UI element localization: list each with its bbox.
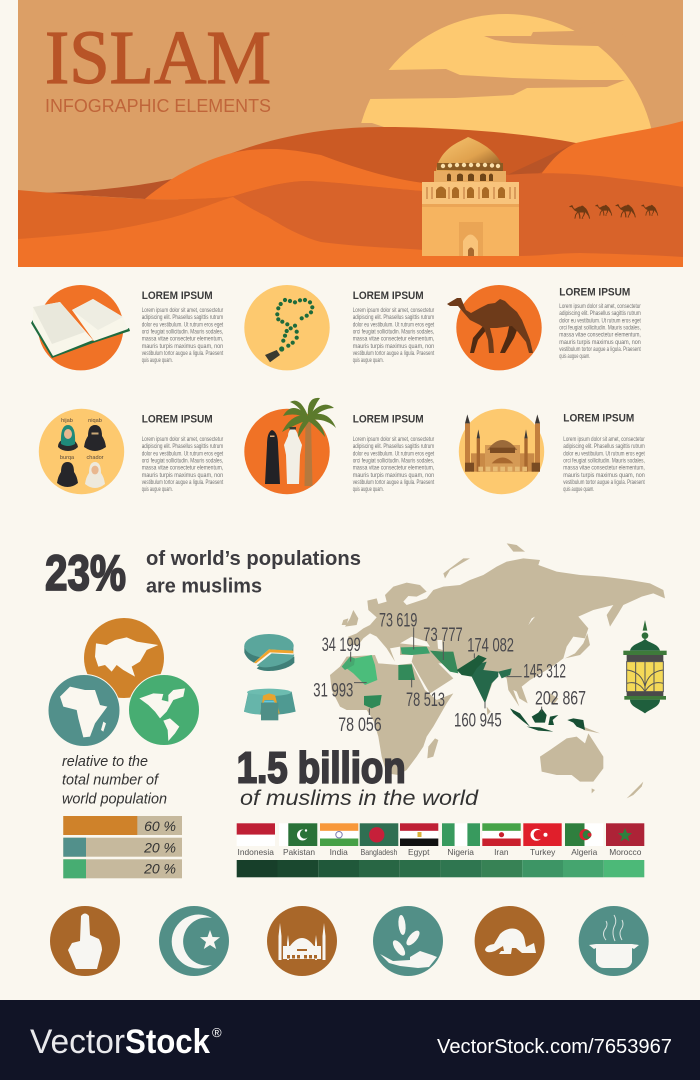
text block: lorem ipsum 6: dolor eu vestibulum. Ut rutrum eros eget (563, 450, 645, 457)
gradient scale (237, 860, 644, 877)
icon: veils (39, 409, 124, 494)
panel: desert hero (18, 0, 683, 267)
text block: lorem ipsum 5 (353, 414, 435, 493)
text block: lorem ipsum 3: dolor eu vestibulum. Ut rutrum eros eget (559, 317, 641, 324)
text block: lorem ipsum 3: orci feugiat sollicitudin. Mauris sodales, (559, 324, 641, 332)
text block: lorem ipsum 5: LOREM IPSUM (353, 414, 424, 426)
text block: lorem ipsum 3: quis augue quam. (559, 353, 590, 360)
camel caravan (569, 204, 658, 219)
caption: relative to total: total number of (62, 772, 160, 788)
flag: Morocco (606, 823, 644, 857)
text block: lorem ipsum 6: Lorem ipsum dolor sit amet, consectetur (563, 436, 645, 443)
icon: lantern (623, 620, 667, 713)
bar chart: 20 % (143, 839, 176, 855)
flag: India (320, 823, 358, 857)
flag: Nigeria: Nigeria (447, 847, 474, 857)
text block: lorem ipsum 2: adipiscing elit. Phasellus sagittis rutrum (353, 314, 434, 321)
text block: lorem ipsum 4: mauris turpis maximus quam, non (142, 472, 224, 479)
text block: lorem ipsum 5: quis augue quam. (353, 486, 384, 493)
map value labels: 31 993 (313, 680, 353, 702)
text block: lorem ipsum 5: Lorem ipsum dolor sit amet, consectetur (353, 436, 435, 443)
text block: lorem ipsum 3: massa vitae consectetur elementum, (559, 332, 641, 339)
stat: 23 percent: 23% (45, 545, 126, 601)
icon: open book (31, 285, 130, 370)
map value labels: 160 945 (454, 710, 502, 732)
watermark band: VectorStock.com/7653967 (437, 1036, 672, 1058)
text block: lorem ipsum 1: mauris turpis maximus quam, non (142, 343, 224, 350)
text block: lorem ipsum 2: dolor eu vestibulum. Ut rutrum eros eget (353, 321, 434, 328)
inland seas (400, 617, 535, 650)
text block: lorem ipsum 5: mauris turpis maximus quam, non (353, 472, 435, 479)
caption: relative to total (62, 754, 167, 807)
text block: lorem ipsum 1: adipiscing elit. Phasellus sagittis rutrum (142, 314, 223, 321)
text block: lorem ipsum 1: LOREM IPSUM (142, 290, 213, 302)
icon: prayer beads (244, 285, 330, 370)
flag: Iran (482, 823, 521, 857)
text block: lorem ipsum 2: orci feugiat sollicitudin. Mauris sodales, (353, 328, 434, 336)
text block: lorem ipsum 5: dolor eu vestibulum. Ut rutrum eros eget (353, 450, 434, 457)
stat: 23 percent: are muslims (146, 576, 262, 598)
stat: 23 percent (45, 545, 361, 601)
icon: pie slice (244, 634, 294, 671)
icon: pointing hand (50, 906, 120, 976)
flag: Morocco: Morocco (609, 847, 642, 857)
text block: lorem ipsum 1: vestibulum tortor augue a ligula. Praesent (142, 350, 223, 357)
text block: lorem ipsum 3: adipiscing elit. Phasellus sagittis rutrum (559, 310, 641, 317)
text block: lorem ipsum 2: mauris turpis maximus quam, non (353, 343, 435, 350)
dunes (18, 121, 683, 267)
map value labels: 78 513 (406, 689, 445, 711)
text block: lorem ipsum 6: LOREM IPSUM (563, 413, 634, 425)
sun (361, 14, 651, 143)
continent circles (48, 618, 200, 746)
text block: lorem ipsum 3: LOREM IPSUM (559, 287, 630, 299)
caption: relative to total: relative to the (62, 754, 148, 770)
watermark band: Vector (30, 1023, 125, 1061)
map value labels: 73 777 (423, 624, 463, 646)
icon: crescent and star (159, 906, 229, 976)
flag: Nigeria (442, 823, 480, 857)
text block: lorem ipsum 3 (559, 287, 641, 360)
text block: lorem ipsum 5: adipiscing elit. Phasellus sagittis rutrum (353, 443, 434, 450)
text block: lorem ipsum 6: massa vitae consectetur elementum, (563, 465, 645, 472)
text block: lorem ipsum 1 (142, 290, 224, 364)
leader lines (351, 627, 542, 715)
flag: Algeria: Algeria (571, 847, 598, 857)
text block: lorem ipsum 3: Lorem ipsum dolor sit amet, consectetur (559, 303, 641, 310)
icon: veils: hijab (61, 418, 73, 424)
flag: Egypt: Egypt (408, 847, 430, 857)
bar chart: 60 % (144, 818, 176, 834)
icon: cap (244, 689, 296, 720)
text block: lorem ipsum 4: LOREM IPSUM (142, 414, 213, 426)
bar chart: 20 % (143, 860, 176, 876)
text block: lorem ipsum 6: vestibulum tortor augue a ligula. Praesent (563, 479, 645, 486)
subtitle: INFOGRAPHIC ELEMENTS (45, 95, 271, 116)
highlighted countries (342, 647, 585, 732)
map value labels: 73 619 (379, 610, 417, 632)
icon: veils: niqab (88, 418, 102, 424)
flag: Indonesia (237, 823, 275, 857)
text block: lorem ipsum 3: vestibulum tortor augue a ligula. Praesent (559, 346, 641, 353)
watermark band: Stock (125, 1023, 210, 1061)
map value labels: 174 082 (467, 635, 514, 657)
map value labels: 78 056 (338, 714, 382, 736)
stat: 23 percent: of world’s populations (146, 548, 361, 570)
text block: lorem ipsum 1: Lorem ipsum dolor sit amet, consectetur (142, 307, 224, 314)
text block: lorem ipsum 4: orci feugiat sollicitudin. Mauris sodales, (142, 458, 223, 464)
text block: lorem ipsum 2: LOREM IPSUM (353, 290, 424, 302)
flag: Pakistan: Pakistan (283, 847, 315, 857)
text block: lorem ipsum 6: orci feugiat sollicitudin. Mauris sodales, (563, 458, 645, 464)
icon: cooking pot (579, 906, 649, 976)
map value labels: 145 312 (523, 661, 566, 683)
text block: lorem ipsum 4: massa vitae consectetur elementum, (142, 465, 223, 472)
text block: lorem ipsum 1: dolor eu vestibulum. Ut rutrum eros eget (142, 321, 223, 328)
text block: lorem ipsum 2: quis augue quam. (353, 357, 384, 364)
text block: lorem ipsum 4: dolor eu vestibulum. Ut rutrum eros eget (142, 450, 223, 457)
map value labels: 202 867 (535, 687, 586, 709)
flag: Bangladesh: Bangladesh (361, 847, 398, 857)
icon: praying figure (475, 906, 545, 976)
map value labels (313, 610, 586, 736)
text block: lorem ipsum 2: massa vitae consectetur elementum, (353, 336, 434, 343)
text block: lorem ipsum 5: vestibulum tortor augue a ligula. Praesent (353, 479, 434, 486)
flag: Turkey (523, 823, 562, 857)
text block: lorem ipsum 6: mauris turpis maximus quam, non (563, 472, 645, 479)
world map (330, 543, 665, 798)
text block: lorem ipsum 6: quis augue quam. (563, 486, 594, 493)
text block: lorem ipsum 5: orci feugiat sollicitudin. Mauris sodales, (353, 458, 434, 464)
icon: veils: chador (86, 455, 104, 461)
bar chart (63, 816, 182, 878)
text block: lorem ipsum 6: adipiscing elit. Phasellus sagittis rutrum (563, 443, 645, 450)
flag: Egypt (400, 823, 438, 857)
flag: Algeria (565, 823, 603, 857)
icon: couple and palm (244, 398, 336, 494)
flag: Turkey: Turkey (530, 847, 556, 857)
text block: lorem ipsum 4: Lorem ipsum dolor sit amet, consectetur (142, 436, 224, 443)
text block: lorem ipsum 5: massa vitae consectetur elementum, (353, 465, 434, 472)
watermark band (0, 1000, 700, 1080)
watermark band: ® (212, 1025, 222, 1040)
flag: Bangladesh (360, 823, 398, 857)
text block: lorem ipsum 1: quis augue quam. (142, 357, 173, 364)
text block: lorem ipsum 1: orci feugiat sollicitudin. Mauris sodales, (142, 328, 223, 336)
flag: India: India (330, 847, 348, 857)
icon: hand with coins (373, 906, 443, 976)
stat: 1.5 billion (237, 744, 479, 810)
text block: lorem ipsum 2: vestibulum tortor augue a ligula. Praesent (353, 350, 434, 357)
flag: Iran: Iran (494, 847, 509, 857)
text block: lorem ipsum 4 (142, 414, 224, 493)
icon: camel (447, 285, 542, 370)
flag: Indonesia: Indonesia (238, 847, 274, 857)
map value labels: 34 199 (322, 634, 361, 656)
icon: veils: burqa (60, 455, 75, 461)
text block: lorem ipsum 4: vestibulum tortor augue a ligula. Praesent (142, 479, 223, 486)
icon: mosque (459, 409, 544, 494)
text block: lorem ipsum 2: Lorem ipsum dolor sit amet, consectetur (353, 307, 435, 314)
flags row (237, 823, 644, 857)
text block: lorem ipsum 3: mauris turpis maximus quam, non (559, 339, 641, 346)
stat: 1.5 billion: of muslims in the world (240, 787, 479, 810)
text block: lorem ipsum 2 (353, 290, 435, 364)
mausoleum (422, 137, 519, 256)
text block: lorem ipsum 6 (563, 413, 645, 493)
text block: lorem ipsum 4: quis augue quam. (142, 486, 173, 493)
clouds (360, 31, 624, 128)
title: ISLAM (45, 16, 271, 100)
flag: Pakistan (279, 823, 317, 857)
icon: mosque silhouette (267, 906, 337, 976)
stat: 1.5 billion: 1.5 billion (237, 744, 406, 793)
text block: lorem ipsum 4: adipiscing elit. Phasellus sagittis rutrum (142, 443, 223, 450)
caption: relative to total: world population (62, 791, 167, 807)
text block: lorem ipsum 1: massa vitae consectetur elementum, (142, 336, 223, 343)
